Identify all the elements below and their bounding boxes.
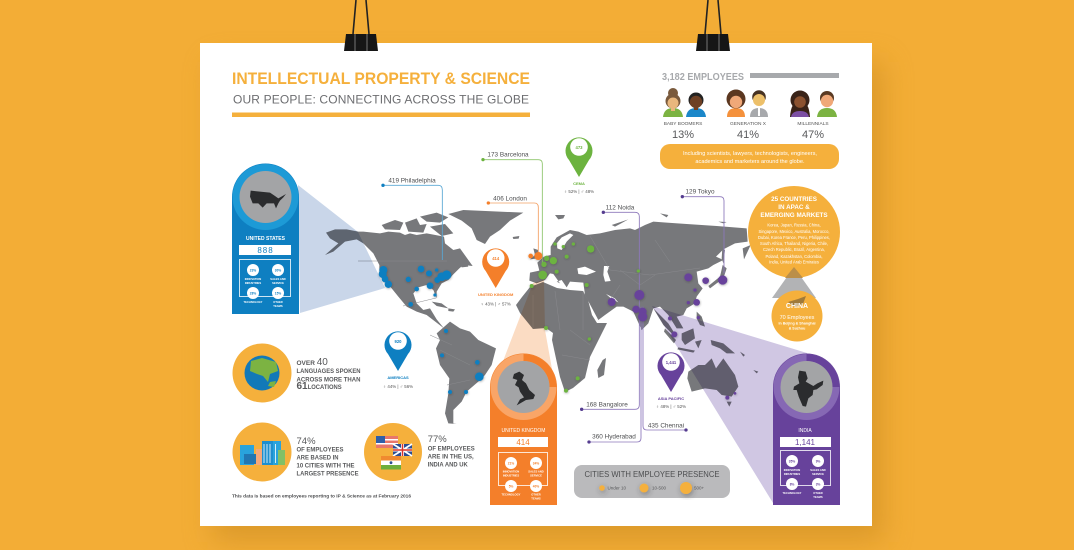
- pin: Americas: AMERICAS: [387, 375, 409, 380]
- callout: APAC and emerging markets: EMERGING MARKETS: [760, 212, 828, 219]
- employee statistics: MILLENNIALS: [797, 121, 829, 127]
- callout: China: in Beijing & Shanghai: [779, 322, 815, 326]
- map: Eurasia: [529, 213, 751, 330]
- panel: India: [773, 354, 840, 505]
- pin: EMEA: [564, 137, 594, 194]
- pin: Asia Pacific: 1,441: [666, 360, 677, 365]
- callout: APAC and emerging markets: Poland, Kazakhstan, Colombia,: [765, 254, 823, 259]
- connector: markets to China: [772, 267, 816, 298]
- callout: APAC and emerging markets: India, United Arab Emirates: [769, 260, 819, 264]
- city labels: 168 Bangalore: [586, 402, 628, 408]
- pin: EMEA: 473: [576, 145, 583, 150]
- pin: Asia Pacific: ASIA PACIFIC: [658, 396, 684, 401]
- panel: United States: UNITED STATES: [246, 236, 286, 242]
- map: Africa: [516, 282, 607, 392]
- panel: India: 9%: [816, 460, 820, 464]
- callout: APAC and emerging markets: 25 COUNTRIES: [771, 196, 817, 203]
- icon: baby boomers: [663, 88, 706, 117]
- panel: United States: TECHNOLOGY: [244, 300, 263, 304]
- legend: cities with employee presence: Under 10: [608, 486, 627, 490]
- panel: India: SALES AND: [810, 468, 826, 472]
- employee statistics: 41%: [737, 129, 759, 141]
- legend: cities with employee presence: 500+: [694, 486, 705, 490]
- callout: APAC and emerging markets: Czech Republic, Brazil, Argentina,: [763, 247, 825, 252]
- panel: United States: TEAMS: [273, 304, 283, 308]
- icon: generation x: [726, 90, 768, 117]
- legend: cities with employee presence: 10-500: [652, 486, 667, 490]
- callout: workforce description: Including scientists, lawyers, technologists, engineers,: [683, 151, 817, 157]
- text: top countries: INDIA AND UK: [428, 462, 468, 468]
- binder clip left: [344, 0, 378, 51]
- map: Southeast Asia and Australia: [653, 308, 758, 407]
- panel: United States: SERVICE: [272, 281, 284, 285]
- region wedges: [298, 185, 807, 503]
- employee statistics: [660, 72, 839, 169]
- pin: Americas: ♀ 44% | ♂ 56%: [383, 384, 413, 389]
- title: INTELLECTUAL PROPERTY & SCIENCE: [232, 70, 530, 88]
- legend: cities with employee presence: CITIES WITH EMPLOYEE PRESENCE: [584, 470, 720, 479]
- text: languages: LANGUAGES SPOKEN: [296, 369, 360, 375]
- panel: United Kingdom: [490, 354, 557, 505]
- city labels: [388, 152, 715, 440]
- title: [232, 70, 530, 117]
- binder clip right: [696, 0, 730, 51]
- callout: APAC and emerging markets: IN APAC &: [778, 204, 810, 211]
- text: cities: [296, 436, 358, 478]
- panel: India: TECHNOLOGY: [783, 491, 802, 495]
- panel: United Kingdom: UNITED KINGDOM: [502, 428, 545, 434]
- title: OUR PEOPLE: CONNECTING ACROSS THE GLOBE: [233, 92, 529, 106]
- panel: United States: 888: [257, 246, 274, 255]
- city labels: 360 Hyderabad: [592, 434, 636, 440]
- panel: United Kingdom: TEAMS: [531, 496, 541, 500]
- text: languages: [296, 357, 360, 392]
- icon: millennials: [790, 90, 837, 117]
- city labels: 406 London: [493, 196, 527, 202]
- pin: Americas: 920: [394, 339, 402, 344]
- panel: United Kingdom: SALES AND: [528, 470, 544, 474]
- panel: India: INNOVATION: [784, 468, 800, 472]
- pin: EMEA: ♀ 52% | ♂ 48%: [564, 189, 594, 194]
- text: languages: LOCATIONS: [308, 385, 342, 391]
- panel: India: TEAMS: [813, 495, 823, 499]
- panel: United States: INDUSTRIES: [245, 281, 261, 285]
- callout: China: [772, 290, 822, 342]
- icon: globe: [232, 344, 292, 402]
- callout: China: & Suzhou: [789, 326, 805, 330]
- text: languages: 61: [296, 381, 308, 392]
- panel: United Kingdom: 5%: [509, 484, 513, 488]
- pin: Asia Pacific: [656, 352, 686, 409]
- callout: APAC and emerging markets: Dubai, Korea France, Peru, Philippines,: [758, 235, 830, 240]
- employee statistics: GENERATION X: [730, 121, 767, 127]
- employee statistics: 13%: [672, 129, 694, 141]
- pin: United Kingdom: UNITED KINGDOM: [478, 292, 514, 297]
- panel: United Kingdom: TECHNOLOGY: [502, 492, 521, 496]
- panel: India: INDUSTRIES: [784, 472, 800, 476]
- map: country borders: [358, 236, 700, 385]
- pin: United Kingdom: [478, 248, 514, 306]
- text: top countries: [428, 434, 475, 468]
- callout: workforce description: [660, 144, 839, 169]
- pin: United Kingdom: 414: [492, 256, 500, 261]
- employee statistics: 3,182 EMPLOYEES: [662, 72, 744, 83]
- panel: United States: OTHER: [273, 300, 283, 304]
- city labels: 173 Barcelona: [487, 152, 529, 158]
- legend: cities with employee presence: [574, 465, 730, 498]
- icon: city buildings: [232, 422, 292, 482]
- poster sheet: [200, 43, 872, 526]
- panel: India: 3%: [816, 482, 820, 486]
- employee statistics: BABY BOOMERS: [664, 121, 702, 127]
- employee statistics: 47%: [802, 129, 824, 141]
- footnote: This data is based on employees reporting to IP & Science as at February 2016: [232, 494, 411, 500]
- city labels: 112 Noida: [606, 204, 635, 212]
- panel: United Kingdom: 34%: [533, 462, 539, 466]
- text: cities: 74%: [296, 436, 316, 447]
- pin: Americas: [383, 331, 413, 389]
- callout: APAC and emerging markets: [748, 186, 840, 278]
- panel: United Kingdom: 21%: [508, 462, 514, 466]
- pin: EMEA: CEMA: [573, 181, 585, 186]
- pin: Asia Pacific: ♀ 48% | ♂ 52%: [656, 404, 686, 409]
- panel: United Kingdom: SERVICE: [530, 474, 542, 478]
- panel: India: SERVICE: [812, 472, 824, 476]
- panel: United Kingdom: INNOVATION: [503, 470, 519, 474]
- panel: United Kingdom: 40%: [533, 484, 539, 488]
- callout: APAC and emerging markets: South Africa, Thailand, Nigeria, Chile,: [760, 241, 828, 246]
- map: South America: [436, 322, 496, 424]
- icon: USA silhouette: [250, 191, 286, 208]
- callout: China: 70 Employees: [780, 315, 815, 321]
- world map: [325, 210, 758, 424]
- city labels: 419 Philadelphia: [388, 178, 436, 184]
- panel: India: OTHER: [813, 491, 823, 495]
- panel: United States: 28%: [250, 292, 256, 296]
- text: top countries: 77%: [428, 434, 447, 445]
- panel: India: INDIA: [798, 428, 812, 434]
- text: top countries: OF EMPLOYEES: [428, 447, 475, 453]
- callout: China: CHINA: [786, 303, 808, 310]
- text: cities: ARE BASED IN: [296, 456, 338, 462]
- text: languages: ACROSS MORE THAN: [296, 378, 360, 384]
- panel: United States: INNOVATION: [245, 277, 261, 281]
- icon: India silhouette: [793, 371, 823, 407]
- callout: APAC and emerging markets: Korea, Japan, Russia, China,: [767, 222, 821, 228]
- panel: United States: SALES AND: [270, 277, 286, 281]
- panel: United States: 15%: [275, 292, 281, 296]
- callout: workforce description: academics and marketers around the globe.: [695, 159, 805, 165]
- map: North America: [325, 210, 523, 328]
- icon: flags: [364, 423, 422, 481]
- panel: United Kingdom: 414: [516, 438, 530, 447]
- panel: United Kingdom: OTHER: [531, 492, 541, 496]
- text: cities: 10 CITIES WITH THE: [296, 464, 354, 470]
- text: cities: LARGEST PRESENCE: [296, 472, 358, 478]
- panel: India: 35%: [789, 460, 795, 464]
- panel: United Kingdom: INDUSTRIES: [503, 474, 519, 478]
- text: cities: OF EMPLOYEES: [296, 448, 344, 454]
- panel: United States: [232, 164, 299, 314]
- panel: United States: 30%: [275, 268, 281, 272]
- panel: India: 1,141: [795, 438, 816, 447]
- city labels: 435 Chennai: [648, 422, 684, 430]
- leader lines: [381, 158, 724, 444]
- panel: United States: 23%: [250, 268, 256, 272]
- callout: APAC and emerging markets: Singapore, Mexico, Australia, Morocco,: [758, 229, 830, 234]
- text: top countries: ARE IN THE US,: [428, 455, 474, 461]
- icon: UK silhouette: [513, 372, 535, 405]
- panel: India: 8%: [790, 482, 794, 486]
- city dots: [379, 242, 736, 400]
- text: languages: OVER 40: [296, 357, 328, 368]
- city labels: 129 Tokyo: [685, 188, 715, 196]
- pin: United Kingdom: ♀ 43% | ♂ 57%: [481, 302, 511, 306]
